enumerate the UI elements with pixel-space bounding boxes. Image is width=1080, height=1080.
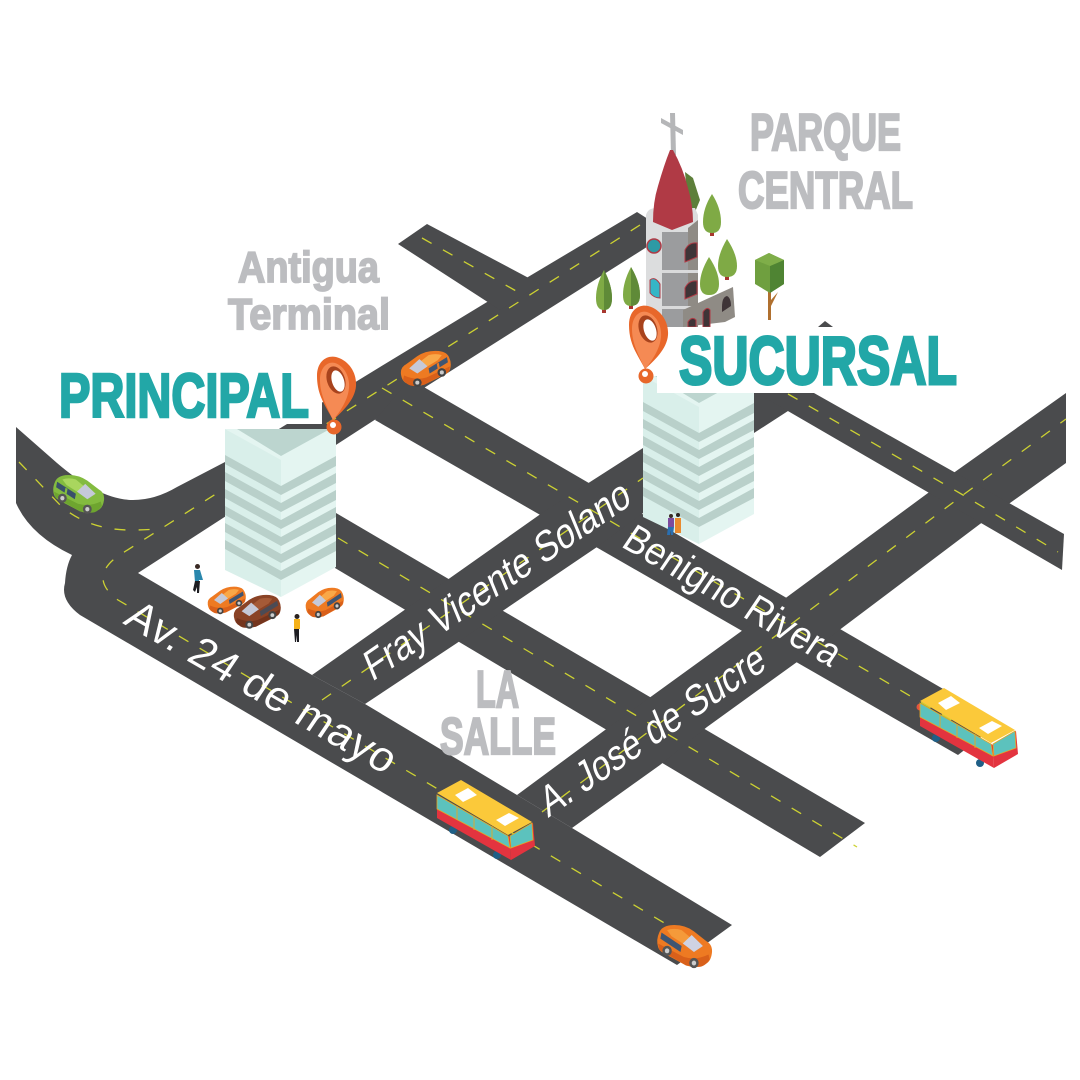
label: La Salle: SALLE: [440, 708, 556, 766]
icon: couple at sucursal: [667, 513, 681, 535]
icon: bus on Av. 24 de mayo: [437, 780, 535, 860]
label: Antigua Terminal: Terminal: [228, 290, 390, 339]
icon: red spire: [653, 150, 693, 230]
heading: SUCURSAL: SUCURSAL: [679, 323, 957, 399]
principal building: [225, 429, 336, 597]
label: Parque Central: CENTRAL: [738, 162, 913, 220]
street name: Fray Vicente Solano: Fray Vicente Solano: [357, 468, 636, 690]
icon: cypress trees: [596, 194, 737, 313]
street name: Benigno Rivera: Benigno Rivera: [615, 517, 851, 675]
label: Parque Central: PARQUE: [750, 104, 901, 162]
road: upper right street: [700, 340, 1064, 570]
icon: woman walking: [294, 614, 300, 642]
street network: [16, 212, 1066, 965]
label: Parque Central: [738, 104, 913, 220]
road: top stub: [398, 224, 540, 310]
road: Fray Vicente Solano: [312, 368, 810, 704]
icon: tower: [646, 208, 698, 327]
icon: sucursal location pin: [629, 306, 668, 384]
icon: parked orange car left: [208, 587, 246, 614]
icon: bus on Benigno Rivera: [916, 688, 1018, 768]
label: La Salle: LA: [476, 661, 519, 719]
icon: principal location pin: [317, 357, 356, 434]
icon: parked brown car: [234, 595, 281, 629]
white backing behind SUCURSAL: [657, 327, 967, 393]
street name: Av. 24 de mayo: Av. 24 de mayo: [116, 591, 407, 783]
icon: parked orange car right: [306, 588, 344, 618]
heading: PRINCIPAL: PRINCIPAL: [59, 362, 309, 431]
icon: orange car on upper avenue: [401, 351, 451, 387]
icon: cross: [661, 113, 683, 155]
sucursal building: [643, 376, 754, 544]
street name: A. José de Sucre: A. José de Sucre: [533, 633, 771, 826]
icon: man walking: [193, 564, 203, 593]
label: La Salle: [440, 661, 556, 766]
icon: leafy tree: [755, 253, 784, 320]
icon: orange car at bottom: [657, 925, 712, 968]
road: curved junction, upper avenue and Av. 24 de mayo: [16, 212, 732, 965]
road: Benigno Rivera: [375, 379, 1000, 755]
icon: dark tree behind spire: [685, 172, 700, 212]
road: lower parallel street: [335, 513, 865, 857]
white backing behind PRINCIPAL: [50, 365, 322, 424]
icon: green car: [53, 475, 104, 514]
label: Antigua Terminal: [228, 243, 390, 339]
label: Antigua Terminal: Antigua: [238, 243, 379, 292]
church with trees: [596, 113, 784, 327]
road centre dashes: [19, 225, 1066, 947]
icon: low chapel wall: [683, 287, 735, 327]
road: small corner above sucursal label: [818, 321, 833, 327]
road: A. José de Sucre: [517, 393, 1066, 828]
